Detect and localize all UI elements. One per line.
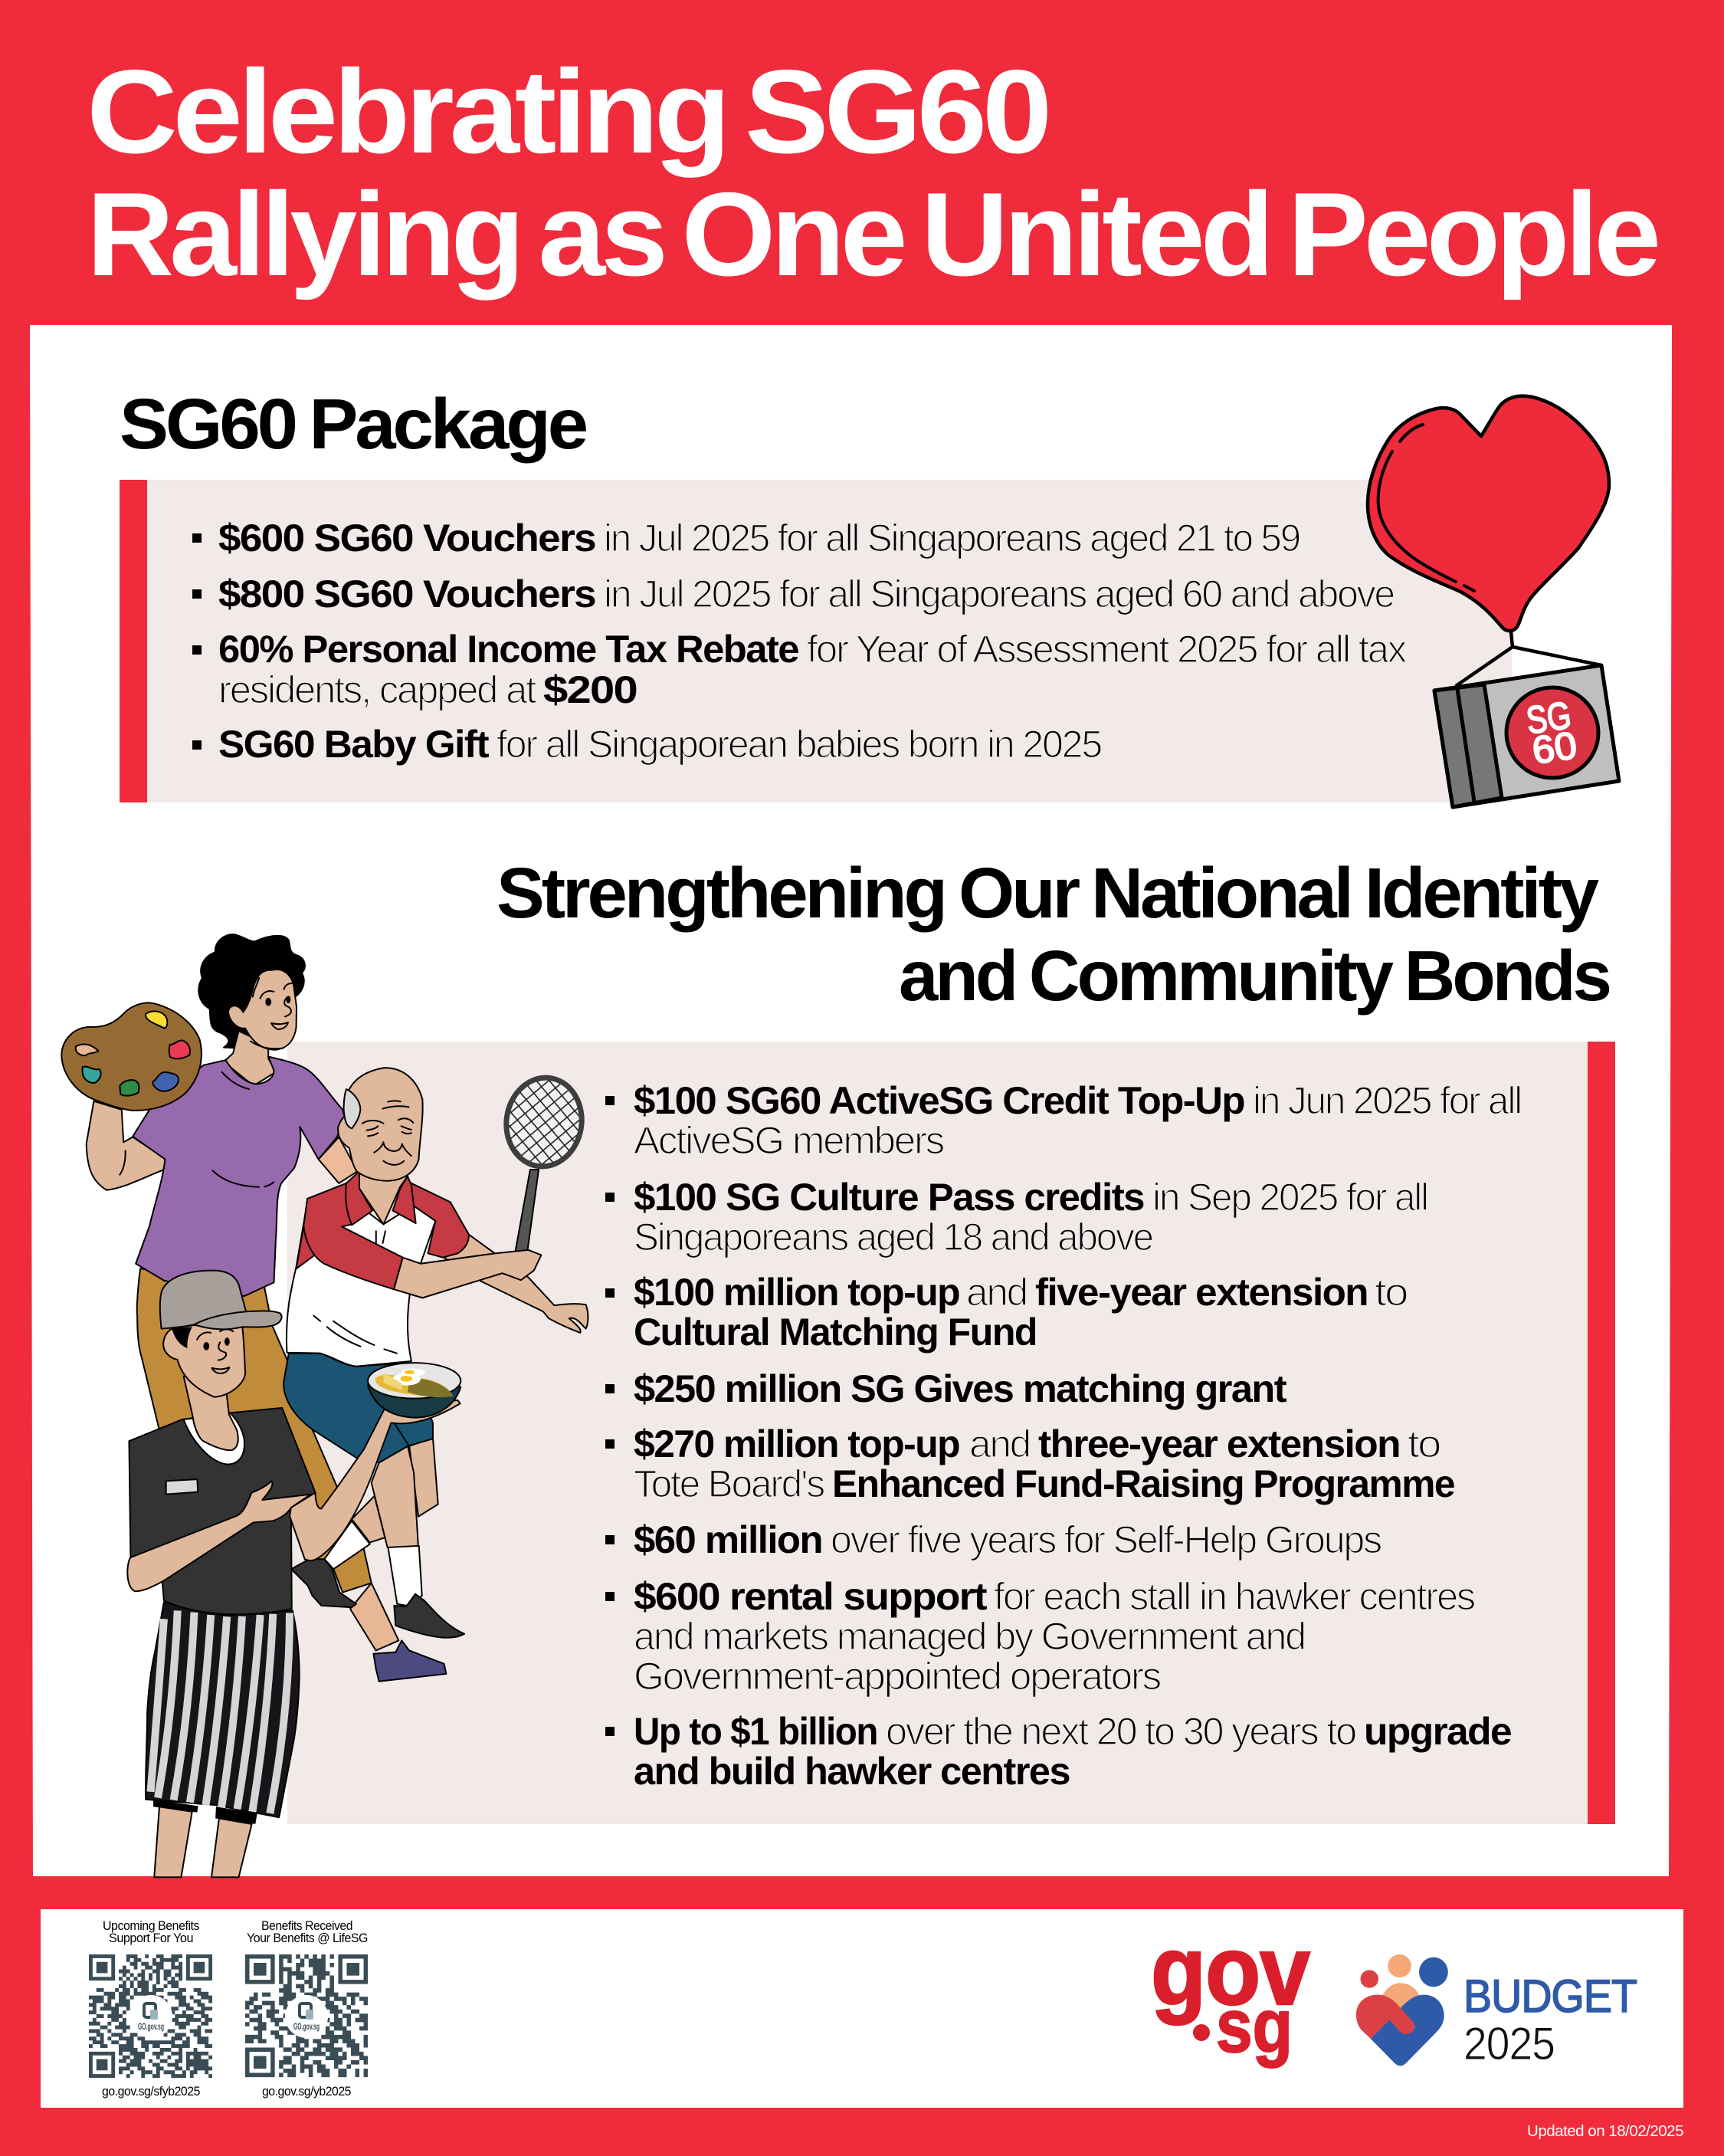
- bullet: Tote Board: Enhanced Fund-Raising Programme: [832, 1462, 1455, 1505]
- icon: heart balloon carrying SG60 gift box: [1368, 396, 1619, 807]
- figure: artist woman, upper body: [61, 934, 358, 1296]
- title: Celebrating SG60: [87, 45, 1047, 178]
- legs: [154, 1807, 192, 1877]
- gift box: 60: [1529, 724, 1579, 773]
- bullet: SG Culture Pass: in Sep 2025 for all: [1152, 1176, 1427, 1219]
- bullet: SG Gives: $250 million SG Gives matching grant: [634, 1367, 1287, 1410]
- bullet: $600 vouchers: in Jul 2025 for all Singaporeans aged 21 to 59: [604, 517, 1300, 560]
- bullet: ActiveSG top-up: [605, 1079, 1521, 1162]
- logo: Budget 2025: 2025: [1463, 2018, 1555, 2069]
- bullet: SG Culture Pass: Singaporeans aged 18 and above: [634, 1216, 1152, 1258]
- QR caption: [103, 1918, 199, 1945]
- bullet: rental support: [605, 1575, 1475, 1698]
- logo: Budget 2025: BUDGET: [1463, 1971, 1637, 2022]
- neck: [184, 1377, 238, 1450]
- bullet: baby gift: [192, 723, 1101, 766]
- title: [87, 45, 1657, 300]
- logo: Budget 2025: [1356, 1954, 1637, 2069]
- bullet: Self-Help Groups: over five years for Self-Help Groups: [831, 1518, 1381, 1561]
- figure: artist woman, trousers and shoes: [137, 1268, 446, 1682]
- bullet: ActiveSG top-up: ActiveSG members: [634, 1119, 944, 1162]
- bullet: income tax rebate: $200: [543, 668, 637, 711]
- footnote: updated date: Updated on 18/02/2025: [1527, 2123, 1683, 2140]
- hair: [198, 934, 305, 1048]
- bullet: income tax rebate: 60% Personal Income Tax Rebate: [218, 628, 799, 671]
- bullet: income tax rebate: [192, 628, 1407, 711]
- bullet: Cultural Matching Fund: Cultural Matching Fund: [634, 1311, 1037, 1354]
- illustration: artist, senior badminton player and hawker: [61, 934, 588, 1877]
- collar: [346, 1171, 372, 1225]
- logo: gov.sg: [1151, 1916, 1310, 2068]
- shorts: [153, 1800, 198, 1813]
- bullet: Tote Board: three-year extension: [1038, 1423, 1400, 1465]
- logo: gov.sg: gov: [1151, 1916, 1310, 2026]
- bullet: hawker centres: [605, 1710, 1512, 1793]
- bullet: rental support: Government-appointed operators: [634, 1655, 1161, 1698]
- red accent bar: [1588, 1042, 1615, 1824]
- bullet: baby gift: for all Singaporean babies born in 2025: [497, 723, 1101, 766]
- main white panel: [30, 325, 1672, 1876]
- bullet: hawker centres: over the next 20 to 30 years to: [886, 1710, 1355, 1753]
- apron stripes: [151, 1610, 290, 1813]
- raised arm: [87, 1101, 166, 1190]
- bullet: Tote Board: $270 million top-up: [634, 1423, 959, 1465]
- logo: gov.sg: sg: [1216, 1984, 1293, 2068]
- QR code: [245, 1954, 368, 2077]
- QR caption: Support For You: [109, 1931, 193, 1945]
- red accent bar: [120, 480, 147, 802]
- panel: national identity list: [287, 1042, 1615, 1824]
- QR centre logo: GO.gov.sg: [138, 2021, 164, 2032]
- serving arm: [290, 1400, 460, 1560]
- white shirt: [287, 1202, 435, 1367]
- bullet: Tote Board: [605, 1423, 1455, 1505]
- purple shirt: [133, 1057, 345, 1296]
- bullet: rental support: and markets managed by Government and: [634, 1615, 1305, 1658]
- arm behind: [319, 1137, 358, 1183]
- paint palette: [61, 1003, 202, 1111]
- QR short link: go.gov.sg/yb2025: [262, 2084, 351, 2099]
- bullet: SG Culture Pass: [605, 1176, 1427, 1258]
- title: Rallying as One United People: [87, 168, 1657, 300]
- figure: senior man, legs and shorts: [284, 1354, 464, 1638]
- bullet: income tax rebate: for Year of Assessment 2025 for all tax: [807, 628, 1407, 671]
- racket: [516, 1170, 539, 1252]
- QR caption: Upcoming Benefits: [103, 1918, 199, 1933]
- QR block: Benefits Received: [245, 1918, 368, 2099]
- heading: SG60 Package: SG60 Package: [120, 384, 586, 464]
- head: [338, 1068, 423, 1181]
- bullet: Cultural Matching Fund: to: [1375, 1271, 1407, 1314]
- bullet: Cultural Matching Fund: five-year extension: [1035, 1271, 1368, 1314]
- figure: hawker with apron: [127, 1377, 460, 1877]
- bullet: $800 vouchers: in Jul 2025 for all Singaporeans aged 60 and above: [604, 573, 1394, 615]
- QR caption: Your Benefits @ LifeSG: [247, 1931, 368, 1945]
- panel: SG60 package list: [120, 480, 1512, 802]
- icon: Budget heart with people: [1356, 1954, 1448, 2066]
- bullet: ActiveSG top-up: $100 SG60 ActiveSG Credit Top-Up: [634, 1079, 1244, 1122]
- front arm with racket hand: [394, 1250, 541, 1298]
- bullet: Tote Board: and: [969, 1423, 1030, 1465]
- QR caption: Benefits Received: [261, 1918, 352, 1933]
- bullet: rental support: for each stall in hawker centres: [994, 1575, 1475, 1618]
- bullet: baby gift: SG60 Baby Gift: [218, 723, 490, 766]
- QR centre logo: [129, 1995, 172, 2038]
- bullet: Cultural Matching Fund: [605, 1271, 1407, 1354]
- front arm: [127, 1481, 311, 1591]
- neck: [224, 1031, 276, 1086]
- apron: [146, 1603, 300, 1817]
- neck: [359, 1173, 408, 1224]
- bullet: income tax rebate: residents, capped at: [218, 668, 536, 711]
- bullet: rental support: $600 rental support: [634, 1575, 988, 1618]
- white neckline: [184, 1413, 244, 1465]
- balloon strings: [1456, 632, 1601, 686]
- icon: badminton racket head: [500, 1073, 588, 1171]
- noodle bowl: [368, 1363, 460, 1418]
- cap: [160, 1271, 282, 1329]
- figure: hawker head and noodle bowl: [160, 1271, 460, 1418]
- figure: senior man, upper body: [287, 1068, 588, 1367]
- bullet: $800 vouchers: [192, 573, 1394, 615]
- bullet: Tote Board: Tote Board's: [634, 1462, 824, 1505]
- gift box: [1434, 665, 1619, 807]
- QR block: Upcoming Benefits: [89, 1918, 212, 2099]
- bullet: $800 vouchers: $800 SG60 Vouchers: [218, 573, 595, 615]
- heart balloon: [1368, 396, 1609, 631]
- heading: Strengthening Our National Identity and Community Bonds: Strengthening Our National Identity: [497, 853, 1599, 933]
- bullet: $600 vouchers: [192, 517, 1300, 560]
- QR short link: go.gov.sg/sfyb2025: [102, 2084, 200, 2099]
- face: [163, 1325, 245, 1397]
- bullet: ActiveSG top-up: in Jun 2025 for all: [1253, 1079, 1521, 1122]
- footer white panel: [41, 1909, 1683, 2108]
- back arm: [443, 1235, 588, 1333]
- black shirt: [129, 1408, 316, 1614]
- QR code: [89, 1954, 212, 2078]
- QR centre logo: [285, 1995, 328, 2038]
- bullet: Self-Help Groups: $60 million: [634, 1518, 822, 1561]
- bullet: Cultural Matching Fund: and: [966, 1271, 1027, 1314]
- QR centre logo: GO.gov.sg: [293, 2021, 320, 2032]
- bullet: hawker centres: upgrade: [1364, 1710, 1512, 1753]
- bullet: Cultural Matching Fund: $100 million top-up: [634, 1271, 959, 1314]
- heading: Strengthening Our National Identity and Community Bonds: [497, 853, 1609, 1016]
- red shirt sleeves: [297, 1226, 315, 1268]
- bullet: hawker centres: and build hawker centres: [634, 1750, 1070, 1793]
- QR caption: [247, 1918, 368, 1945]
- bullet: Tote Board: to: [1408, 1423, 1440, 1465]
- bullet: hawker centres: Up to $1 billion: [634, 1710, 877, 1753]
- heading: Strengthening Our National Identity and Community Bonds: and Community Bonds: [899, 936, 1609, 1016]
- face: [228, 970, 297, 1050]
- gift box: SG: [1524, 694, 1574, 742]
- bullet: SG Culture Pass: $100 SG Culture Pass credits: [634, 1176, 1144, 1219]
- bullet: $600 vouchers: $600 SG60 Vouchers: [218, 517, 595, 560]
- name tag: [166, 1479, 198, 1495]
